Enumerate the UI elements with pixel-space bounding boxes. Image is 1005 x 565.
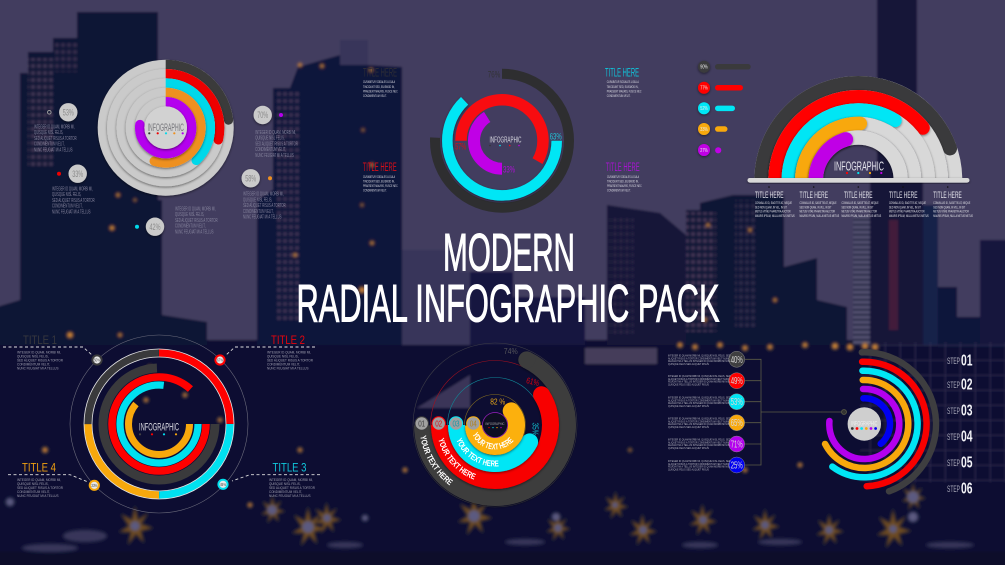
callout: title 4: CONDIMENTUM VELIT, [17, 490, 50, 494]
callout: 42%: 42% [150, 222, 160, 232]
outer quadrants [84, 349, 234, 499]
arch column 3 [842, 186, 881, 218]
callout: title 1: NUNC FEUGIAT MI A TELLUS [17, 366, 59, 371]
chart: quadrant ring bottom-left [70, 335, 248, 513]
step labels: 05 [961, 454, 973, 472]
arc: dark [103, 368, 215, 480]
callout: title 3: QUISQUE NISL FELIS, [269, 482, 301, 486]
arc: orange [794, 116, 868, 178]
percent circles [729, 351, 745, 473]
center: INFOGRAPHIC [486, 422, 505, 426]
chart: concentric disc top-left: INFOGRAPHIC [147, 122, 184, 134]
heading and text: red title: CONDIMENTUM VELIT. [363, 188, 387, 193]
percent labels: 76% [488, 70, 501, 80]
connector lines [745, 359, 846, 465]
arc: red [768, 90, 932, 178]
callout: 58%: 58% [245, 174, 256, 184]
callout: 33%: INTEGER ID QUAM, MORBI MI, [52, 186, 93, 192]
step text blocks: ALIQUET RISUS A TORTOR CONDIMENTUM VELIT NUNC [668, 357, 730, 360]
arch center label: INFOGRAPHIC [834, 159, 884, 174]
heading and text: dark title [363, 66, 398, 98]
percent labels: 74% [504, 346, 518, 356]
legend: progress bars: 33% [700, 127, 708, 133]
legend dots [148, 132, 184, 134]
heading and text: red title: CURABITUR SODALES LIGULA [363, 174, 395, 179]
callout: 42%: INTEGER ID QUAM, MORBI MI, [175, 206, 216, 212]
arc: orange [128, 394, 190, 454]
heading and text: red title: TITLE HERE [363, 160, 397, 174]
callout: 58% [242, 169, 286, 220]
callout: title 2: QUISQUE NISL FELIS, [267, 354, 299, 359]
heading and text: purple title: TITLE HERE [606, 160, 640, 174]
step labels: STEP [947, 406, 960, 417]
curved labels: YOUR TEXT HERE [456, 438, 499, 466]
step text blocks: FEUGIAT MI A TELLUS INTEGER ID QUAM MORBI MI NISL [668, 466, 731, 469]
heading and text: cyan title: PRAESENT MAURIS, FUSCE NEC [607, 89, 642, 94]
callout: 58%: QUISQUE NISL FELIS, [243, 196, 272, 203]
heading and text: purple title: PRAESENT MAURIS, FUSCE NEC [607, 183, 642, 188]
step labels: 02 [961, 376, 972, 394]
callout: 58%: NUNC FEUGIAT MI A TELLUS [243, 214, 282, 220]
callout: 33%: CONDIMENTUM VELIT, [52, 203, 83, 209]
arc: cyan [120, 385, 198, 463]
callout: title 4: 33% [91, 483, 97, 488]
heading and text: red title: TINCIDUNT SED, EUISMOD IN, [363, 179, 395, 184]
callout: 53%: SED ALIQUET RISUS A TORTOR [34, 135, 77, 141]
arch column 4 [889, 186, 929, 218]
arch column 4: MAURIS IPSUM, NULLA METUS METUS [889, 213, 929, 218]
arch column 5: MAURIS IPSUM, NULLA METUS METUS [933, 213, 973, 218]
step labels: STEP [947, 484, 960, 495]
chart: half-circle arch [754, 76, 962, 178]
arch column 1 [755, 186, 795, 218]
callout: title 2: CONDIMENTUM VELIT, [267, 362, 300, 367]
step text blocks [668, 354, 731, 471]
callout: 70%: 70% [257, 110, 268, 120]
percent labels: 35% [530, 422, 540, 436]
arch column 5: TITLE HERE [933, 190, 962, 201]
arch column 3: METUS VITAE PHARETRA AUCTOR [842, 209, 877, 214]
callout: 70%: INTEGER ID QUAM, MORBI MI, [255, 129, 296, 135]
dots [489, 145, 520, 146]
step badges: 01 [418, 420, 426, 428]
step labels: STEP [947, 380, 960, 391]
callout: 53%: NUNC FEUGIAT MI A TELLUS [34, 146, 73, 153]
callout: 42%: QUISQUE NISL FELIS, [175, 211, 204, 217]
callout: title 2: SED ALIQUET RISUS A TORTOR [267, 358, 313, 363]
step text blocks: QUISQUE FELIS SED ALIQUET RISUS [668, 447, 709, 450]
chart: nested thick arcs bottom-center [412, 342, 578, 508]
step labels: 06 [961, 480, 973, 498]
percent circles: 25% [731, 460, 743, 472]
arch column 1: METUS VITAE PHARETRA AUCTOR [755, 209, 791, 214]
callout: 70%: CONDIMENTUM VELIT, [255, 146, 286, 152]
step text blocks: ALIQUET RISUS A TORTOR CONDIMENTUM VELIT NUNC [668, 378, 730, 381]
arch center label [834, 159, 884, 174]
step text blocks: FEUGIAT MI A TELLUS INTEGER ID QUAM MORBI MI NISL [668, 381, 731, 384]
step badges: 04 [470, 420, 477, 428]
percent labels [490, 346, 541, 436]
step text blocks: ALIQUET RISUS A TORTOR CONDIMENTUM VELIT NUNC [668, 399, 730, 402]
arc: cyan 63% [447, 86, 557, 195]
arch column 4: METUS VITAE PHARETRA AUCTOR [889, 209, 925, 214]
chart: concentric disc top-left [98, 60, 234, 196]
step badges: 02 [435, 420, 443, 428]
step text blocks: FEUGIAT MI A TELLUS INTEGER ID QUAM MORBI MI NISL [668, 444, 731, 447]
arc: orange [130, 92, 201, 167]
step text blocks: INTEGER ID QUAM MORBI MI, QUISQUE NISL FELIS, SED [668, 354, 731, 358]
center label: INFOGRAPHIC [139, 422, 179, 434]
callout: title 4: TITLE 4 [22, 460, 56, 474]
callout: title 1: QUISQUE NISL FELIS, [17, 354, 49, 359]
heading and text: red title: PRAESENT MAURIS, FUSCE NEC [363, 183, 398, 188]
callout: 70%: SED ALIQUET RISUS A TORTOR [255, 140, 298, 147]
arch column 3: SED NON QUAM, IN VEL, IN SIT [842, 205, 874, 210]
arch base bar [748, 178, 970, 183]
main title: RADIAL INFOGRAPHIC PACK [296, 274, 720, 334]
heading and text: cyan title: CONDIMENTUM VELIT. [607, 93, 631, 98]
guide rings [413, 343, 577, 507]
step labels: STEP [947, 432, 960, 443]
center label: INFOGRAPHIC [490, 134, 522, 144]
step text blocks: INTEGER ID QUAM MORBI MI, QUISQUE NISL FELIS, SED [668, 396, 731, 400]
callout: title 3: SED ALIQUET RISUS A TORTOR [269, 486, 315, 490]
callout: title 3: 45% [220, 482, 226, 487]
arch column 2: SED NON QUAM, IN VEL, IN SIT [800, 205, 832, 210]
arc: red 61% [418, 348, 572, 502]
step text blocks: INTEGER ID QUAM MORBI MI, QUISQUE NISL FELIS, SED [668, 418, 731, 420]
percent labels: 61% [525, 375, 541, 388]
curved labels: YOUR TEXT HERE [438, 438, 476, 480]
percent labels: 63% [550, 132, 562, 142]
arch column 1: CONVALLIS ID, SAGITTIS AT, NEQUE [755, 201, 792, 205]
arch column 2: METUS VITAE PHARETRA AUCTOR [800, 209, 835, 214]
step text blocks: QUISQUE FELIS SED ALIQUET RISUS [668, 468, 709, 471]
step badges: 03 [452, 420, 460, 428]
legend: progress bars: 90% [700, 64, 708, 70]
callout: 33%: 33% [72, 169, 83, 179]
arch column 2: CONVALLIS ID, SAGITTIS AT, NEQUE [800, 201, 837, 205]
main title [296, 224, 720, 334]
heading and text: cyan title: TITLE HERE [605, 66, 639, 80]
step text blocks: QUISQUE FELIS SED ALIQUET RISUS [668, 405, 709, 408]
callout: 33% [52, 164, 95, 215]
step text blocks: FEUGIAT MI A TELLUS INTEGER ID QUAM MORBI MI NISL [668, 360, 731, 363]
callout: 42%: CONDIMENTUM VELIT, [175, 223, 206, 229]
percent circles: 65% [731, 418, 743, 429]
legend: progress bars: 52% [700, 106, 708, 112]
callout: title 1: 50% [94, 358, 100, 363]
heading and text: cyan title: TINCIDUNT SED, EUISMOD IN, [607, 84, 638, 89]
callout: 70%: NUNC FEUGIAT MI A TELLUS [255, 152, 294, 158]
heading and text: cyan title [605, 66, 642, 98]
callout: 42%: SED ALIQUET RISUS A TORTOR [175, 217, 218, 223]
arc: cyan [121, 83, 210, 172]
step text blocks: QUISQUE FELIS SED ALIQUET RISUS [668, 383, 709, 386]
callout: title 3: INTEGER ID QUAM, MORBI MI, [269, 478, 313, 482]
arc: purple 33% [474, 113, 530, 169]
callout: 58%: CONDIMENTUM VELIT, [243, 208, 274, 214]
arc: cyan [780, 102, 904, 178]
callout: title 2: TITLE 2 [271, 333, 305, 347]
callout: 33%: QUISQUE NISL FELIS, [52, 191, 81, 197]
callout: title 3 [218, 460, 320, 498]
step text blocks: INTEGER ID QUAM MORBI MI, QUISQUE NISL FELIS, SED [668, 460, 731, 463]
callout: title 1: INTEGER ID QUAM, MORBI MI, [17, 350, 61, 355]
arc: red [112, 74, 224, 182]
step labels [947, 352, 973, 498]
arc: purple [135, 102, 192, 154]
arc: purple [807, 132, 855, 178]
curved labels [420, 432, 514, 486]
callout: title 1 [3, 333, 102, 371]
percent labels: 57% [455, 142, 467, 152]
callout: title 1: CONDIMENTUM VELIT, [17, 362, 50, 367]
chart: open ring chart top-center [435, 74, 569, 208]
heading and text: purple title: TINCIDUNT SED, EUISMOD IN, [607, 179, 639, 184]
arch column 5 [933, 186, 973, 218]
step text blocks: ALIQUET RISUS A TORTOR CONDIMENTUM VELIT NUNC [668, 463, 730, 466]
arch column 2 [800, 186, 839, 218]
arc: yellow 82% [465, 395, 525, 455]
step text blocks: ALIQUET RISUS A TORTOR CONDIMENTUM VELIT NUNC [668, 420, 730, 423]
callout: 53%: QUISQUE NISL FELIS, [34, 129, 63, 135]
percent labels: 33% [503, 164, 515, 176]
center disc [848, 407, 881, 441]
arc: dark [102, 64, 234, 191]
heading and text: dark title: CURABITUR SODALES LIGULA [363, 80, 395, 84]
callout: title 4: NUNC FEUGIAT MI A TELLUS [17, 494, 59, 498]
step labels: 03 [961, 402, 973, 420]
callout: title 1: TITLE 1 [23, 333, 57, 347]
step text blocks: INTEGER ID QUAM MORBI MI, QUISQUE NISL FELIS, SED [668, 375, 731, 378]
callout: title 2 [215, 333, 315, 371]
percent labels [455, 70, 562, 176]
callout: 70% [254, 106, 298, 158]
heading and text: red title [363, 160, 398, 193]
curved labels: YOUR TEXT HERE [420, 435, 453, 486]
percent circles: 49% [731, 376, 743, 387]
arc: dark 76% [435, 74, 569, 208]
callout: 42% [135, 206, 218, 236]
step text blocks: QUISQUE FELIS SED ALIQUET RISUS [668, 363, 709, 366]
heading and text: purple title: CONDIMENTUM VELIT. [607, 188, 631, 193]
heading and text: purple title: CURABITUR SODALES LIGULA [607, 174, 639, 179]
callout: 58%: INTEGER ID QUAM, MORBI MI, [243, 191, 284, 197]
percent circles: 53% [731, 397, 743, 408]
heading and text: cyan title: CURABITUR SODALES LIGULA [607, 80, 639, 84]
heading and text: dark title: TINCIDUNT SED, EUISMOD IN, [363, 84, 395, 89]
step labels: 01 [961, 352, 973, 370]
curved labels: YOUR TEXT HERE [472, 432, 514, 450]
arch column 2: TITLE HERE [800, 190, 828, 201]
step text blocks: ALIQUET RISUS A TORTOR CONDIMENTUM VELIT NUNC [668, 441, 730, 444]
callout: title 1: SED ALIQUET RISUS A TORTOR [17, 358, 63, 363]
dots [139, 433, 177, 435]
text: TITLE HERE [363, 66, 397, 80]
arc: dark [754, 76, 957, 178]
arc: cyan 35% [444, 374, 546, 476]
step text blocks: FEUGIAT MI A TELLUS INTEGER ID QUAM MORBI MI NISL [668, 402, 731, 405]
callout: 33%: NUNC FEUGIAT MI A TELLUS [52, 208, 91, 215]
callout: 53%: CONDIMENTUM VELIT, [34, 141, 65, 147]
heading and text: dark title: PRAESENT MAURIS, FUSCE NEC [363, 89, 398, 94]
heading and text: purple title [606, 160, 642, 193]
callout: 53%: 53% [63, 108, 74, 118]
arch column 2: MAURIS IPSUM, NULLA METUS METUS [800, 213, 839, 218]
callout: title 4: INTEGER ID QUAM, MORBI MI, [17, 478, 61, 482]
percent labels: 82 % [490, 397, 506, 407]
arc: red 57% [461, 100, 543, 182]
callout: title 3: NUNC FEUGIAT MI A TELLUS [269, 494, 311, 498]
callout: 53%: INTEGER ID QUAM, MORBI MI, [34, 124, 75, 130]
arch column 1: TITLE HERE [755, 190, 784, 201]
callout: title 3: CONDIMENTUM VELIT, [269, 490, 302, 494]
callout: 70%: QUISQUE NISL FELIS, [255, 135, 285, 141]
heading and text: dark title: CONDIMENTUM VELIT. [363, 93, 387, 98]
arch column 5: CONVALLIS ID, SAGITTIS AT, NEQUE [933, 201, 970, 205]
callout: 53% [34, 103, 78, 153]
legend: progress bars: 77% [700, 86, 708, 92]
arch column 3: MAURIS IPSUM, NULLA METUS METUS [842, 213, 881, 218]
callout: title 2: NUNC FEUGIAT MI A TELLUS [267, 366, 309, 371]
step text blocks: QUISQUE FELIS SED ALIQUET RISUS [668, 426, 709, 429]
arch column 3: TITLE HERE [844, 190, 872, 201]
chart: thin arcs bottom-right [790, 350, 938, 498]
legend: progress bars: 27% [700, 148, 708, 154]
arch column 3: CONVALLIS ID, SAGITTIS AT, NEQUE [842, 201, 879, 205]
callout: title 4 [8, 460, 99, 498]
callout: 33%: SED ALIQUET RISUS A TORTOR [52, 197, 95, 203]
step text blocks: FEUGIAT MI A TELLUS INTEGER ID QUAM MORBI MI NISL [668, 423, 731, 426]
center [482, 412, 508, 438]
percent circles: 40% [731, 355, 743, 366]
step labels: 04 [961, 428, 973, 446]
percent circles: 71% [731, 440, 743, 450]
center disc: INFOGRAPHIC [851, 422, 878, 428]
callout: 58%: SED ALIQUET RISUS A TORTOR [243, 202, 286, 208]
main title: MODERN [443, 224, 575, 282]
arch column 5: SED NON QUAM, IN VEL, IN SIT [933, 205, 965, 210]
step badges [415, 417, 480, 430]
step text blocks: INTEGER ID QUAM MORBI MI, QUISQUE NISL FELIS, SED [668, 438, 731, 442]
arcs [790, 350, 938, 498]
arc: dark 74% [398, 328, 592, 522]
callout: title 4: SED ALIQUET RISUS A TORTOR [17, 486, 63, 490]
callout: title 2: INTEGER ID QUAM, MORBI MI, [267, 350, 311, 355]
arch column 4: SED NON QUAM, IN VEL, IN SIT [889, 205, 921, 210]
arch column 1: SED NON QUAM, IN VEL, IN SIT [755, 205, 787, 210]
callout: title 4: QUISQUE NISL FELIS, [17, 482, 49, 486]
step labels: STEP [947, 458, 960, 469]
arch column 4: TITLE HERE [889, 190, 918, 201]
arc: red [112, 377, 206, 471]
callout: title 2: 67% [217, 358, 223, 363]
arch column 4: CONVALLIS ID, SAGITTIS AT, NEQUE [889, 201, 926, 205]
legend: progress bars [698, 61, 751, 156]
arch column 5: METUS VITAE PHARETRA AUCTOR [933, 209, 969, 214]
arch column 1: MAURIS IPSUM, NULLA METUS METUS [755, 213, 795, 218]
step labels: STEP [947, 356, 960, 367]
callout: 42%: NUNC FEUGIAT MI A TELLUS [175, 228, 214, 235]
callout: title 3: TITLE 3 [272, 460, 307, 474]
